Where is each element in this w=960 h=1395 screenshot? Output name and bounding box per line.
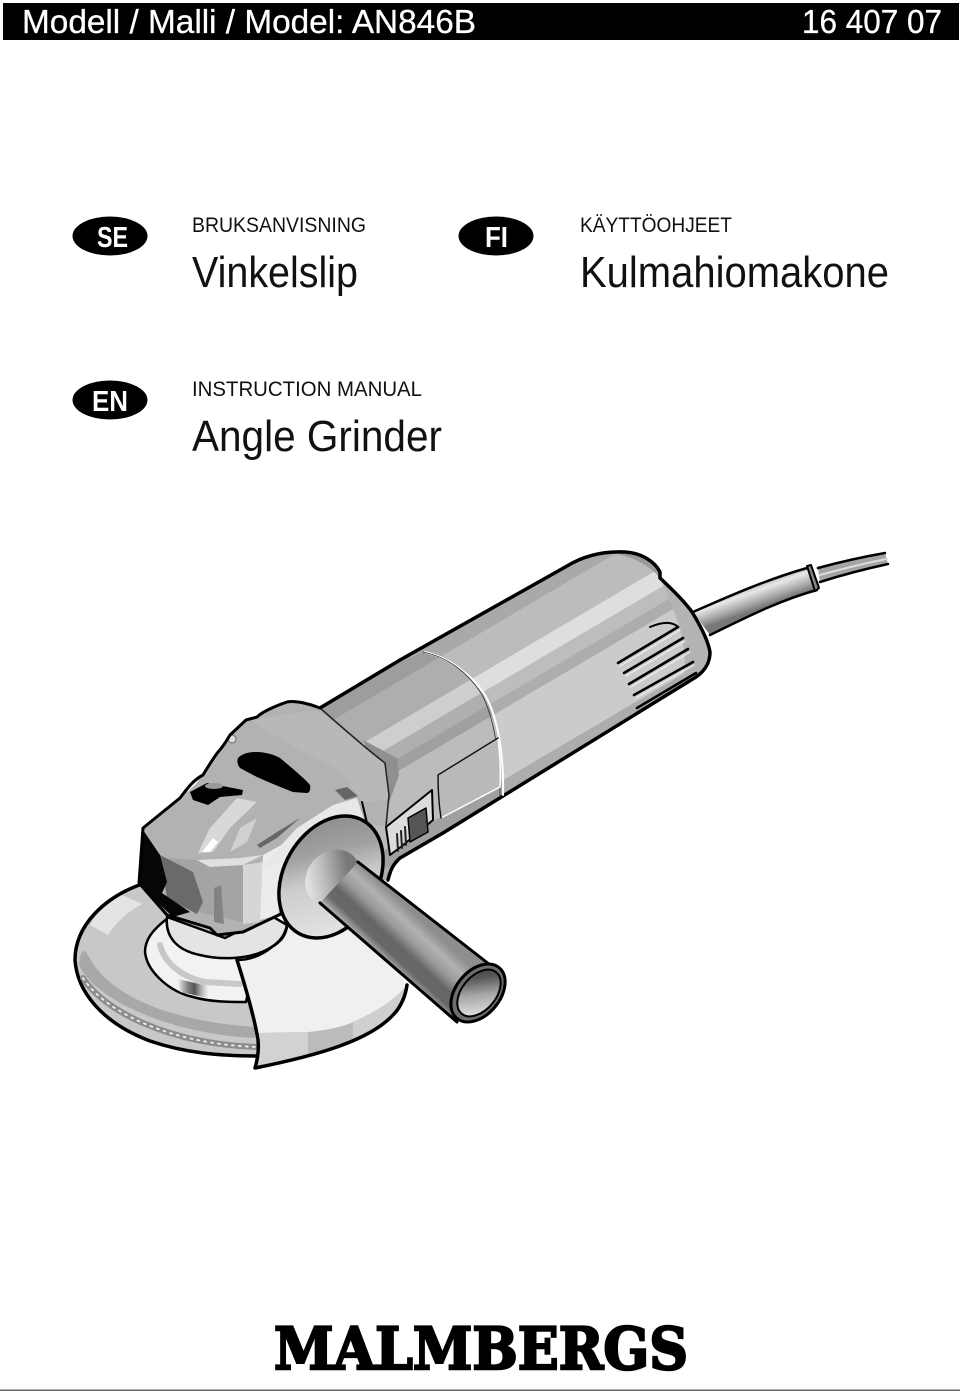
spindle lock button <box>190 783 243 805</box>
head outline <box>139 701 320 935</box>
hub shade ring <box>160 945 240 984</box>
collar face <box>250 710 388 802</box>
guard outline <box>237 960 407 1068</box>
front face <box>163 858 243 922</box>
handle opening <box>449 961 509 1025</box>
label Finnish: KÄYTTÖOHJEET <box>580 213 732 237</box>
head corner line <box>362 802 367 823</box>
ventilation slots <box>618 623 696 708</box>
housing seam <box>425 652 503 795</box>
motor housing <box>319 550 712 882</box>
guard rim <box>256 985 407 1067</box>
front black shadow <box>140 830 190 917</box>
label Swedish: BRUKSANVISNING <box>192 213 366 237</box>
badge SE <box>72 216 148 256</box>
handle tube <box>320 862 503 1022</box>
front mid streak <box>214 885 224 924</box>
disc rim speckle <box>83 978 257 1047</box>
handle end <box>440 954 516 1032</box>
white gap at head edge <box>185 773 202 792</box>
gear head <box>139 701 399 935</box>
hub flange <box>145 918 255 1002</box>
head white highlight <box>202 838 218 852</box>
front dark face <box>160 855 203 914</box>
side handle <box>258 797 516 1032</box>
badge EN: EN <box>92 386 128 418</box>
product name Swedish: Vinkelslip <box>192 248 358 297</box>
model text: Modell / Malli / Model: AN846B <box>22 3 476 40</box>
second streak <box>230 818 257 852</box>
article number: 16 407 07 <box>802 3 942 40</box>
front section tint <box>322 652 502 867</box>
disc highlight <box>90 895 142 935</box>
gear collar <box>167 915 287 958</box>
right screw detail <box>335 787 358 800</box>
vent slot <box>237 752 310 793</box>
badge SE: SE <box>97 222 128 254</box>
head dark streak <box>257 818 300 848</box>
handle flange <box>258 797 404 957</box>
switch <box>386 790 433 855</box>
head base shape <box>139 701 389 935</box>
hub reflection <box>178 979 208 998</box>
disc outer band <box>79 951 255 1038</box>
head highlight streak <box>198 798 257 853</box>
handle edges <box>320 862 503 1022</box>
light area beside flange <box>260 798 364 868</box>
rear dome <box>662 582 708 674</box>
collar shadow <box>363 740 399 808</box>
lower highlight band <box>197 855 263 867</box>
label English: INSTRUCTION MANUAL <box>192 377 422 401</box>
power cord <box>693 553 888 635</box>
brand logo: MALMBERGS <box>274 1315 688 1383</box>
rating plate <box>438 738 500 818</box>
housing shading bands <box>322 554 708 880</box>
language block: Swedish <box>72 213 366 297</box>
product name English: Angle Grinder <box>192 412 442 461</box>
language block: Finnish <box>458 213 889 297</box>
front light panel <box>243 862 263 924</box>
badge FI: FI <box>485 222 508 254</box>
collar line <box>320 708 389 826</box>
badge EN <box>72 380 148 420</box>
right light panel <box>260 842 287 920</box>
bolt detail <box>228 735 236 743</box>
rear end cap <box>616 554 658 576</box>
illustration: angle grinder <box>73 550 890 1070</box>
header bar <box>3 3 959 40</box>
product name Finnish: Kulmahiomakone <box>580 248 889 297</box>
wheel guard <box>237 900 407 1068</box>
language block: English <box>72 377 442 461</box>
housing outline <box>320 552 710 880</box>
cutting disc <box>75 884 300 1056</box>
flange collar <box>294 838 372 918</box>
badge FI <box>458 216 534 256</box>
